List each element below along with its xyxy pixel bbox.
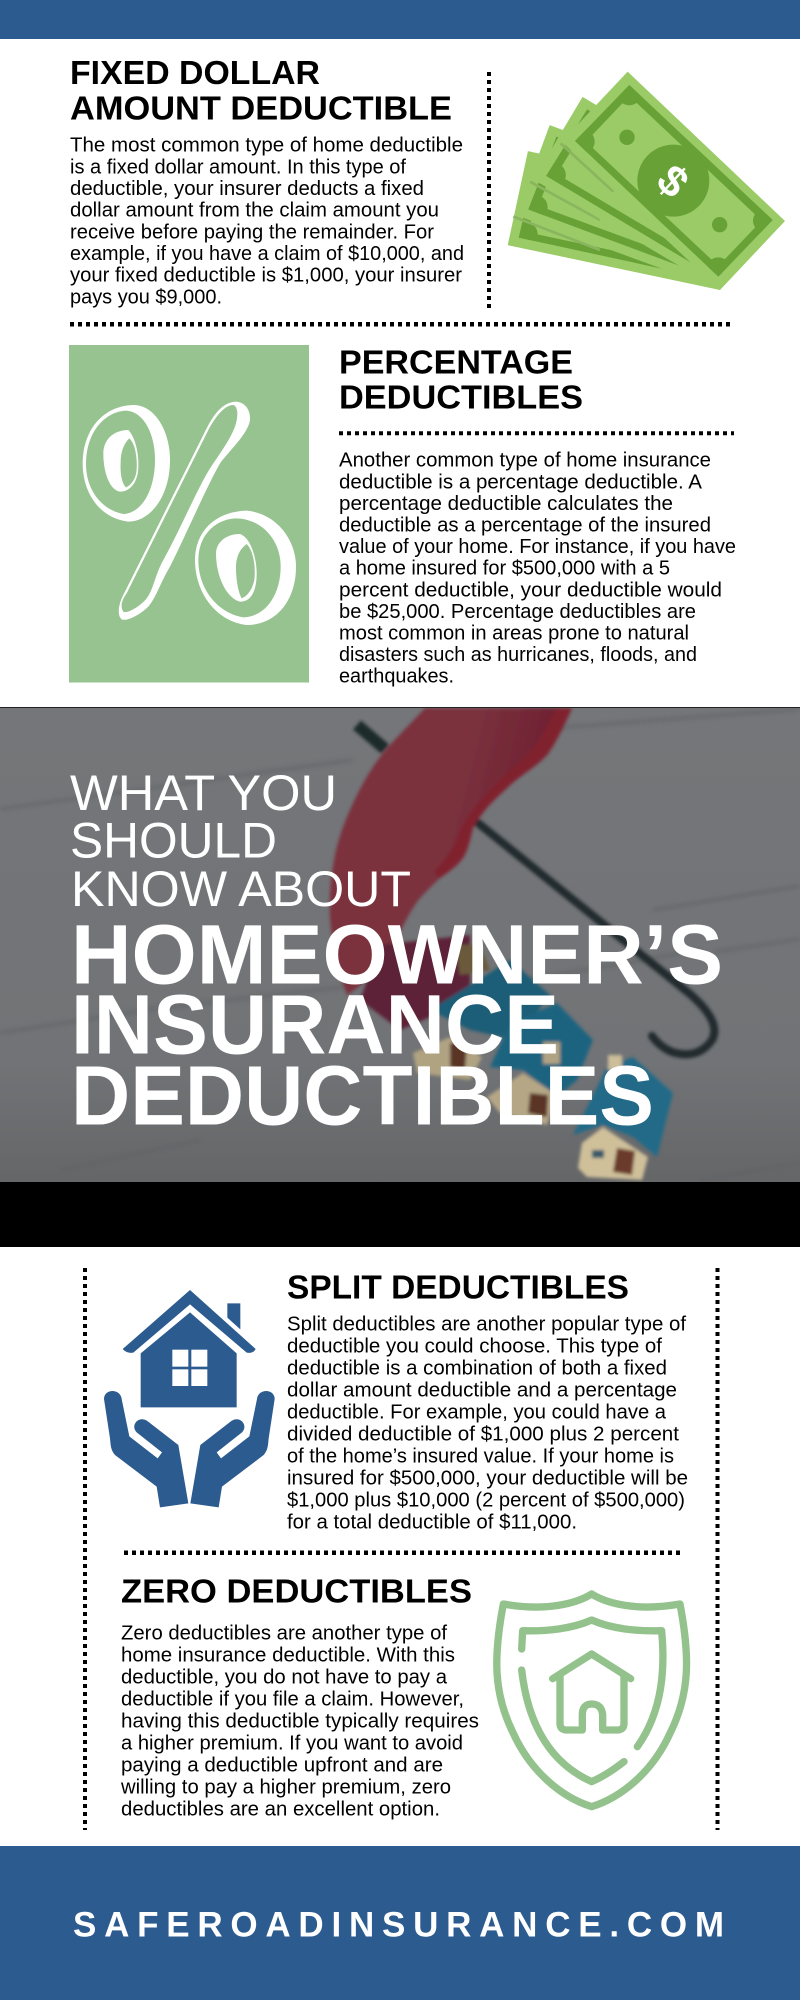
text block: percentage description: disasters such as hurricanes, floods, and	[339, 643, 697, 666]
icon: shield with house	[497, 1594, 687, 1807]
frame: dotted side rules	[85, 1268, 718, 1830]
text block: fixed dollar description: your fixed deductible is $1,000, your insurer	[70, 264, 462, 287]
text block: split description: deductible. For example, you could have a	[287, 1401, 667, 1424]
text block: fixed dollar description: example, if you have a claim of $10,000, and	[70, 242, 464, 265]
text block: zero description: a higher premium. If you want to avoid	[121, 1731, 463, 1754]
text block: percentage description: deductible is a percentage deductible. A	[339, 470, 702, 493]
heading: fixed dollar amount deductible	[70, 55, 452, 128]
heading: fixed dollar amount deductible: AMOUNT DEDUCTIBLE	[70, 90, 452, 128]
text block: zero description	[120, 1621, 479, 1820]
title intro: what you should know about: WHAT YOU	[70, 765, 337, 821]
panel: percentage deductibles	[69, 344, 736, 688]
text block: percentage description: earthquakes.	[339, 665, 454, 688]
text block: percentage description: be $25,000. Percentage deductibles are	[339, 600, 696, 623]
title main: homeowner's insurance deductibles: INSURANCE	[71, 978, 559, 1072]
title intro: what you should know about	[70, 765, 411, 917]
footer band	[0, 1846, 800, 2000]
text block: fixed dollar description: deductible, your insurer deducts a fixed	[70, 177, 424, 200]
heading: fixed dollar amount deductible: FIXED DOLLAR	[70, 55, 320, 92]
text block: zero description: paying a deductible upfront and are	[121, 1753, 443, 1776]
text block: split description: insured for $500,000, your deductible will be	[287, 1467, 688, 1490]
text block: fixed dollar description: dollar amount from the claim amount you	[70, 199, 439, 222]
text block: percentage description: deductible as a percentage of the insured	[339, 514, 711, 536]
text block: zero description: home insurance deductible. With this	[121, 1643, 455, 1666]
text block: zero description: willing to pay a higher premium, zero	[120, 1775, 451, 1798]
icon: percent sign on green panel	[69, 345, 309, 682]
heading: percentage deductibles	[339, 344, 583, 416]
text block: percentage description: most common in areas prone to natural	[339, 622, 689, 644]
text block: percentage description: percent deductible, your deductible would	[339, 578, 722, 601]
text block: percentage description	[339, 449, 736, 688]
hero photo: umbrella over toy houses	[0, 707, 800, 1182]
title intro: what you should know about: KNOW ABOUT	[71, 861, 411, 917]
title intro: what you should know about: SHOULD	[70, 812, 277, 868]
title	[70, 765, 723, 1143]
panel: split deductibles	[104, 1269, 688, 1534]
text block: zero description: having this deductible typically requires	[121, 1709, 479, 1732]
panel: fixed dollar amount deductible	[70, 55, 785, 372]
text block: zero description: Zero deductibles are another type of	[121, 1621, 447, 1644]
text block: percentage description: percentage deductible calculates the	[339, 492, 673, 515]
text block: fixed dollar description	[70, 134, 464, 308]
top band	[0, 0, 800, 39]
text block: split description: of the home’s insured value. If your home is	[287, 1445, 674, 1468]
heading: split deductibles: SPLIT DEDUCTIBLES	[287, 1269, 629, 1306]
title main: homeowner's insurance deductibles: DEDUCTIBLES	[71, 1049, 654, 1143]
heading: percentage deductibles: DEDUCTIBLES	[339, 379, 583, 416]
text block: fixed dollar description: is a fixed dollar amount. In this type of	[70, 155, 406, 178]
text block: zero description: deductibles are an excellent option.	[121, 1797, 440, 1820]
text block: split description: deductible you could choose. This type of	[287, 1335, 662, 1358]
heading: percentage deductibles: PERCENTAGE	[339, 344, 573, 381]
text block: split description: Split deductibles are another popular type of	[287, 1313, 686, 1336]
text block: split description	[287, 1313, 688, 1534]
text block: split description: deductible is a combination of both a fixed	[287, 1357, 667, 1380]
text block: split description: for a total deductible of $11,000.	[287, 1511, 577, 1534]
text block: zero description: deductible if you file a claim. However,	[121, 1687, 464, 1710]
text block: split description: dollar amount deductible and a percentage	[287, 1379, 677, 1402]
title main: homeowner's insurance deductibles	[71, 908, 723, 1143]
heading: zero deductibles: ZERO DEDUCTIBLES	[121, 1573, 472, 1610]
title main: homeowner's insurance deductibles: HOMEOWNER’S	[71, 908, 723, 1002]
text block: split description: $1,000 plus $10,000 (2 percent of $500,000)	[287, 1489, 685, 1512]
icon: fanned dollar bills: $	[647, 156, 698, 207]
text block: zero description: deductible, you do not have to pay a	[121, 1665, 448, 1688]
panel: zero deductibles	[120, 1573, 687, 1820]
text block: fixed dollar description: pays you $9,000.	[70, 285, 222, 308]
text block: fixed dollar description: receive before paying the remainder. For	[70, 220, 434, 243]
text block: percentage description: value of your home. For instance, if you have	[339, 535, 736, 558]
icon: fanned dollar bills	[471, 63, 785, 372]
black band	[0, 1182, 800, 1247]
text block: fixed dollar description: The most common type of home deductible	[70, 134, 463, 157]
text block: percentage description: Another common type of home insurance	[339, 449, 711, 472]
text block: percentage description: a home insured for $500,000 with a 5	[339, 557, 670, 580]
icon: house held by hands	[104, 1290, 275, 1507]
footer website: SAFEROADINSURANCE.COM	[73, 1906, 724, 1945]
text block: split description: divided deductible of $1,000 plus 2 percent	[287, 1423, 679, 1446]
